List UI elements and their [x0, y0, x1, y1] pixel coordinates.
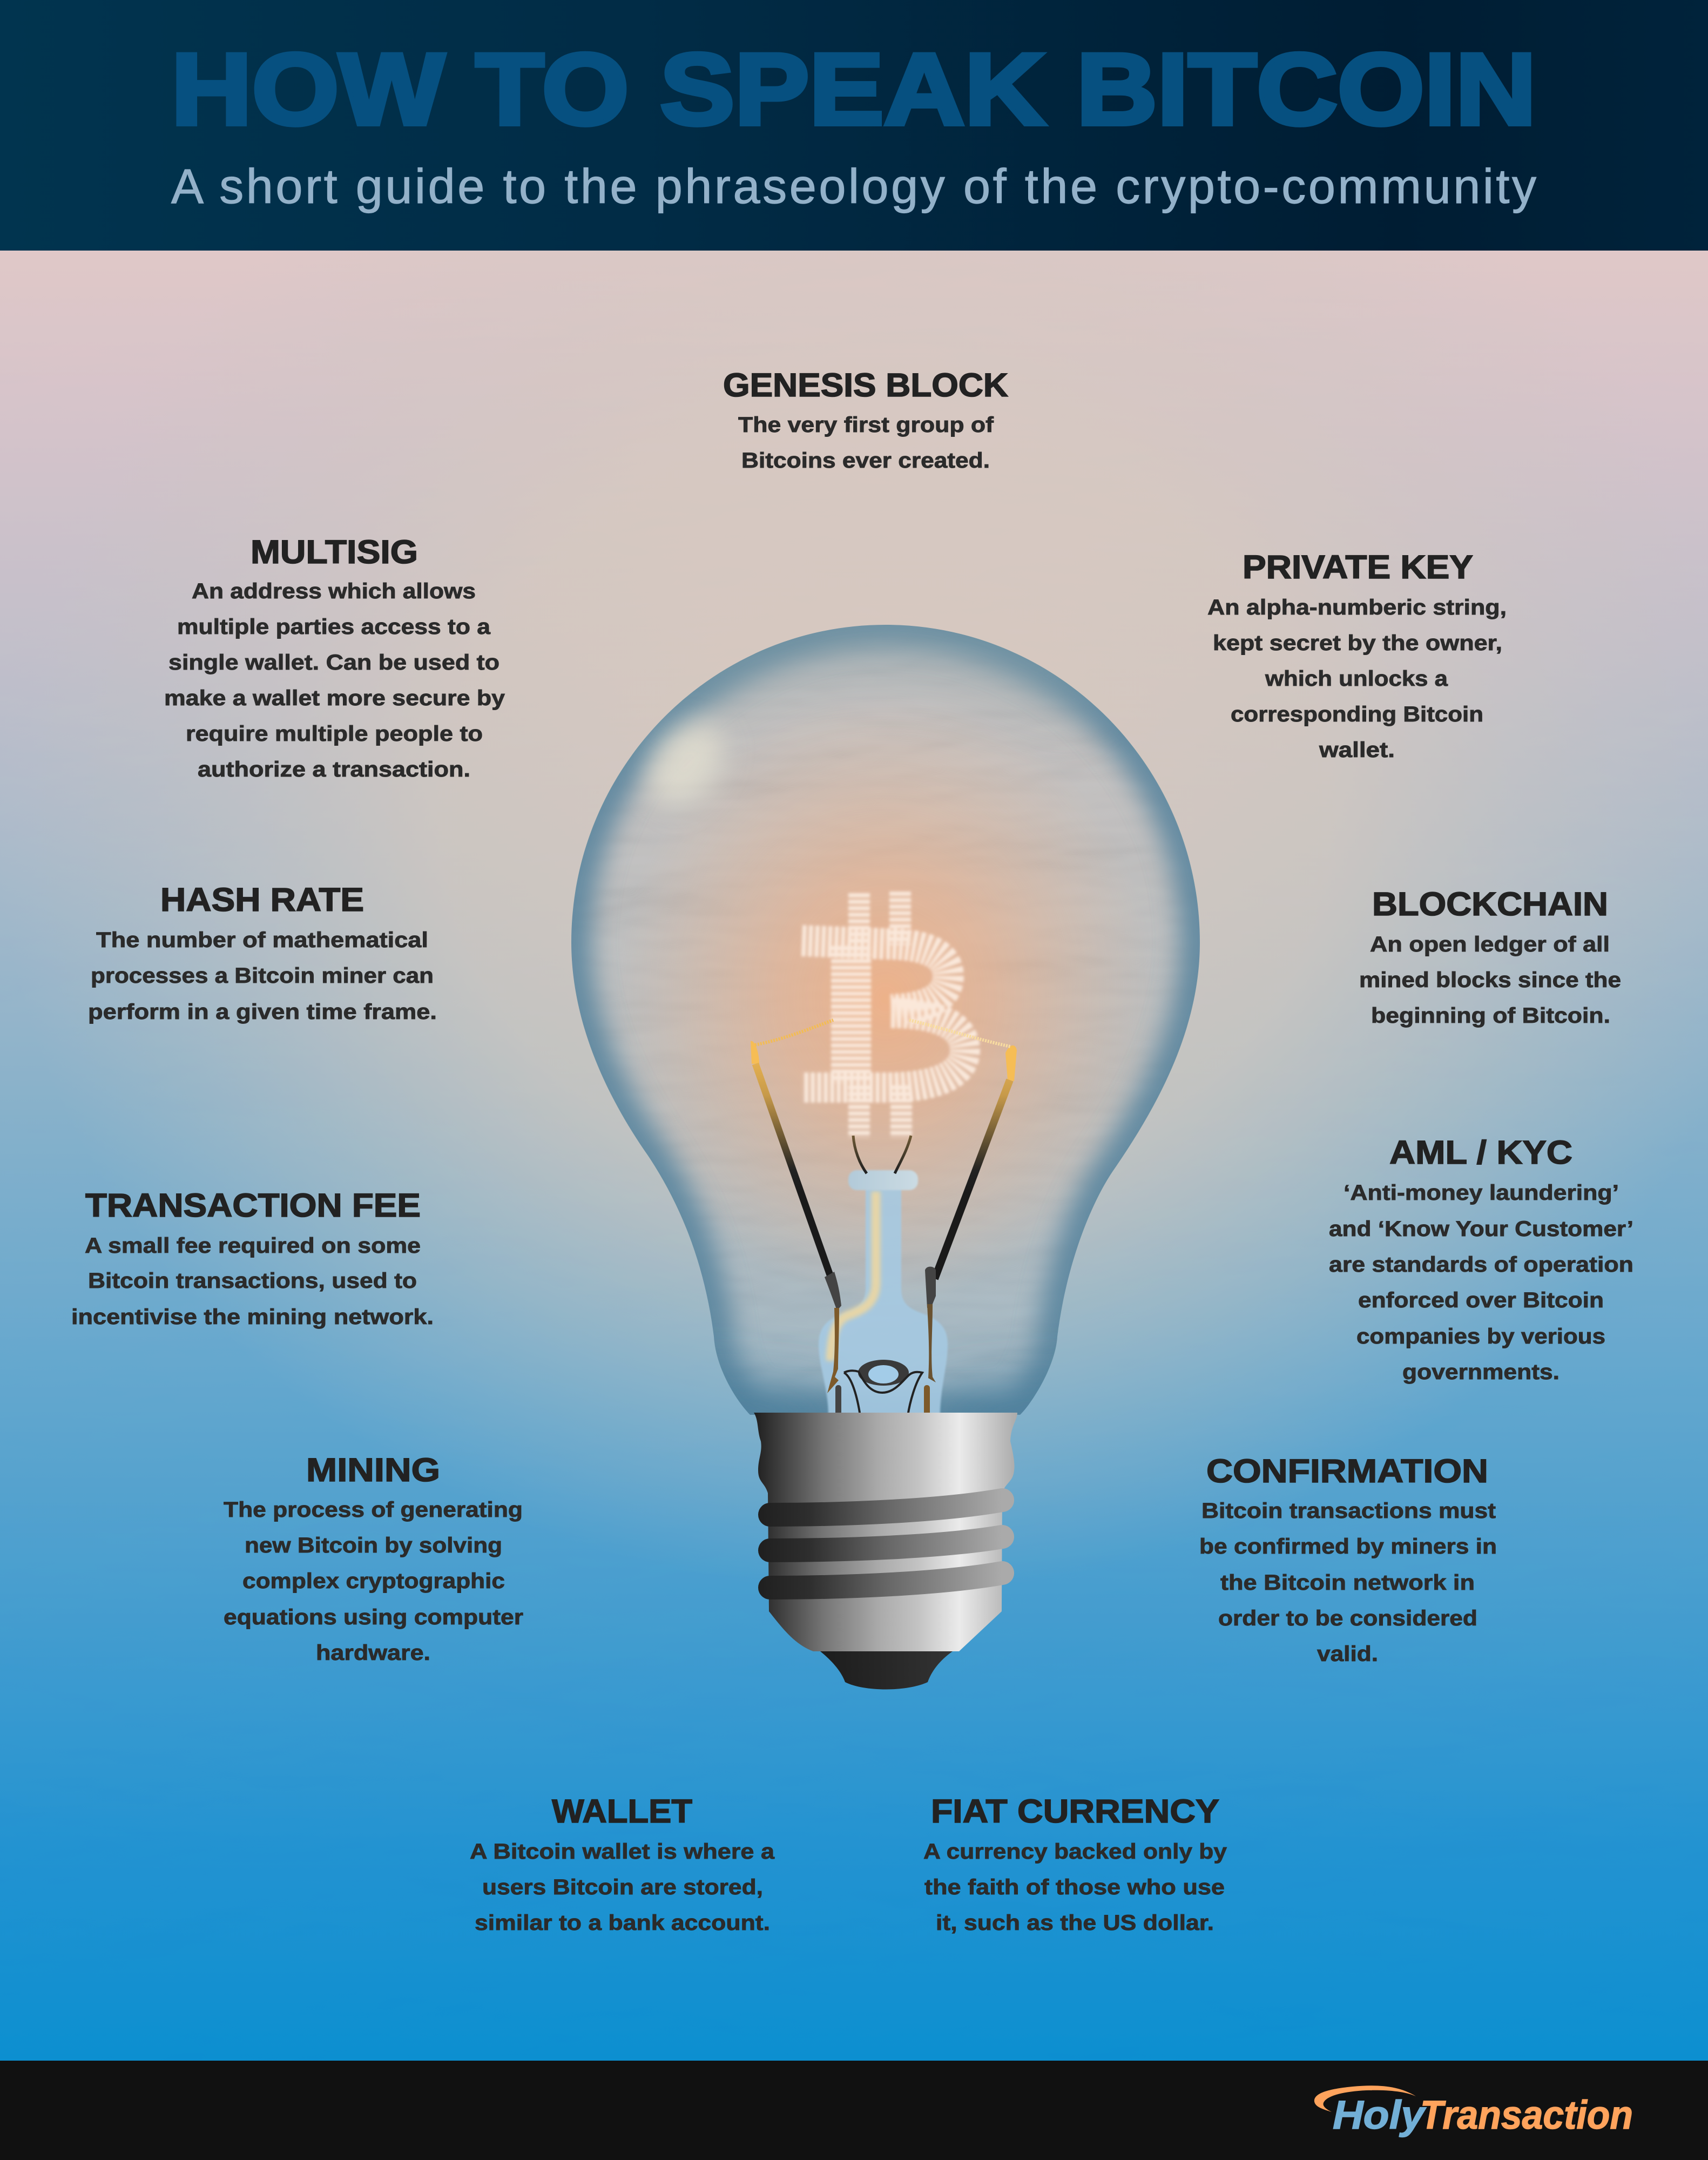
term: aml / kyc: are standards of operation: [1329, 1253, 1633, 1277]
term: blockchain: [1359, 886, 1621, 1028]
bitcoin filament: [802, 892, 965, 1138]
logo: HolyTransaction: Transaction: [1420, 2092, 1633, 2137]
term: aml / kyc: governments.: [1402, 1360, 1560, 1384]
term: confirmation: CONFIRMATION: [1206, 1453, 1488, 1489]
base threads: [770, 1500, 1002, 1588]
term: aml / kyc: and ‘Know Your Customer’: [1329, 1217, 1633, 1241]
term: confirmation: the Bitcoin network in: [1220, 1571, 1475, 1595]
term: multisig: multiple parties access to a: [177, 615, 491, 639]
term: private key: [1207, 549, 1507, 762]
term: genesis block: The very first group of: [738, 413, 994, 437]
term: fiat currency: A currency backed only by: [923, 1840, 1227, 1864]
term: confirmation: Bitcoin transactions must: [1201, 1499, 1496, 1523]
logo: HolyTransaction: [1314, 2085, 1633, 2137]
term: aml / kyc: companies by verious: [1356, 1325, 1605, 1348]
term: blockchain: An open ledger of all: [1370, 933, 1610, 956]
term: multisig: MULTISIG: [251, 534, 418, 570]
term: confirmation: [1199, 1453, 1497, 1666]
support wires: [751, 1020, 1017, 1416]
term: hash rate: The number of mathematical: [96, 928, 428, 952]
bulb glass: [562, 616, 1210, 1442]
term: transaction fee: incentivise the mining network.: [71, 1305, 434, 1329]
term: mining: equations using computer: [224, 1605, 523, 1629]
base contact: [820, 1651, 953, 1689]
term: blockchain: mined blocks since the: [1359, 968, 1621, 992]
header band: [0, 0, 1708, 251]
term: wallet: [470, 1793, 775, 1935]
term: aml / kyc: AML / KYC: [1389, 1134, 1572, 1171]
term: mining: new Bitcoin by solving: [245, 1534, 502, 1557]
term: transaction fee: TRANSACTION FEE: [85, 1187, 421, 1224]
term: fiat currency: [923, 1793, 1227, 1935]
term: hash rate: perform in a given time frame.: [88, 1000, 437, 1024]
term: wallet: similar to a bank account.: [475, 1911, 770, 1935]
term: blockchain: BLOCKCHAIN: [1372, 886, 1608, 922]
term: confirmation: order to be considered: [1218, 1606, 1477, 1630]
term: fiat currency: it, such as the US dollar.: [936, 1911, 1214, 1935]
term: hash rate: [88, 881, 437, 1024]
term: wallet: WALLET: [552, 1793, 692, 1830]
term: mining: hardware.: [316, 1641, 430, 1665]
term: wallet: users Bitcoin are stored,: [482, 1875, 763, 1899]
term: genesis block: Bitcoins ever created.: [741, 449, 990, 473]
term: transaction fee: [71, 1187, 434, 1329]
term: multisig: An address which allows: [192, 579, 476, 603]
term: private key: kept secret by the owner,: [1213, 631, 1502, 655]
title: HOW TO SPEAK BITCOIN: [171, 32, 1536, 146]
term: multisig: authorize a transaction.: [198, 758, 470, 781]
term: aml / kyc: ‘Anti-money laundering’: [1344, 1181, 1619, 1205]
term: mining: The process of generating: [224, 1498, 523, 1522]
term: multisig: require multiple people to: [186, 722, 483, 746]
term: private key: corresponding Bitcoin: [1231, 703, 1483, 726]
term: private key: wallet.: [1319, 738, 1395, 762]
term: private key: An alpha-numberic string,: [1207, 596, 1507, 619]
term: aml / kyc: enforced over Bitcoin: [1358, 1288, 1604, 1312]
term: multisig: single wallet. Can be used to: [168, 651, 499, 674]
glass stem: [819, 1170, 948, 1416]
term: multisig: [164, 534, 505, 781]
term: mining: [224, 1452, 523, 1665]
screw base: [754, 1413, 1017, 1689]
term: aml / kyc: [1329, 1134, 1633, 1384]
logo: HolyTransaction: Holy: [1333, 2092, 1427, 2137]
term: genesis block: GENESIS BLOCK: [723, 367, 1008, 403]
term: mining: MINING: [306, 1452, 440, 1488]
glass mount: [844, 1360, 922, 1416]
subtitle: A short guide to the phraseology of the crypto-community: [171, 160, 1536, 214]
footer band: [0, 2061, 1708, 2160]
term: blockchain: beginning of Bitcoin.: [1371, 1004, 1610, 1028]
term: confirmation: valid.: [1317, 1642, 1378, 1666]
term: hash rate: HASH RATE: [160, 881, 364, 918]
term: hash rate: processes a Bitcoin miner can: [91, 964, 434, 988]
term: transaction fee: Bitcoin transactions, used to: [88, 1269, 417, 1293]
light bulb: [562, 616, 1210, 1689]
term: fiat currency: the faith of those who use: [924, 1875, 1225, 1899]
term: private key: PRIVATE KEY: [1243, 549, 1473, 585]
glass highlight: [633, 706, 731, 813]
term: confirmation: be confirmed by miners in: [1199, 1535, 1497, 1558]
term: genesis block: [723, 367, 1008, 473]
term: transaction fee: A small fee required on some: [85, 1234, 421, 1258]
term: multisig: make a wallet more secure by: [164, 686, 505, 710]
term: fiat currency: FIAT CURRENCY: [931, 1793, 1219, 1830]
term: wallet: A Bitcoin wallet is where a: [470, 1840, 775, 1864]
term: private key: which unlocks a: [1265, 667, 1448, 691]
term: mining: complex cryptographic: [242, 1569, 505, 1593]
